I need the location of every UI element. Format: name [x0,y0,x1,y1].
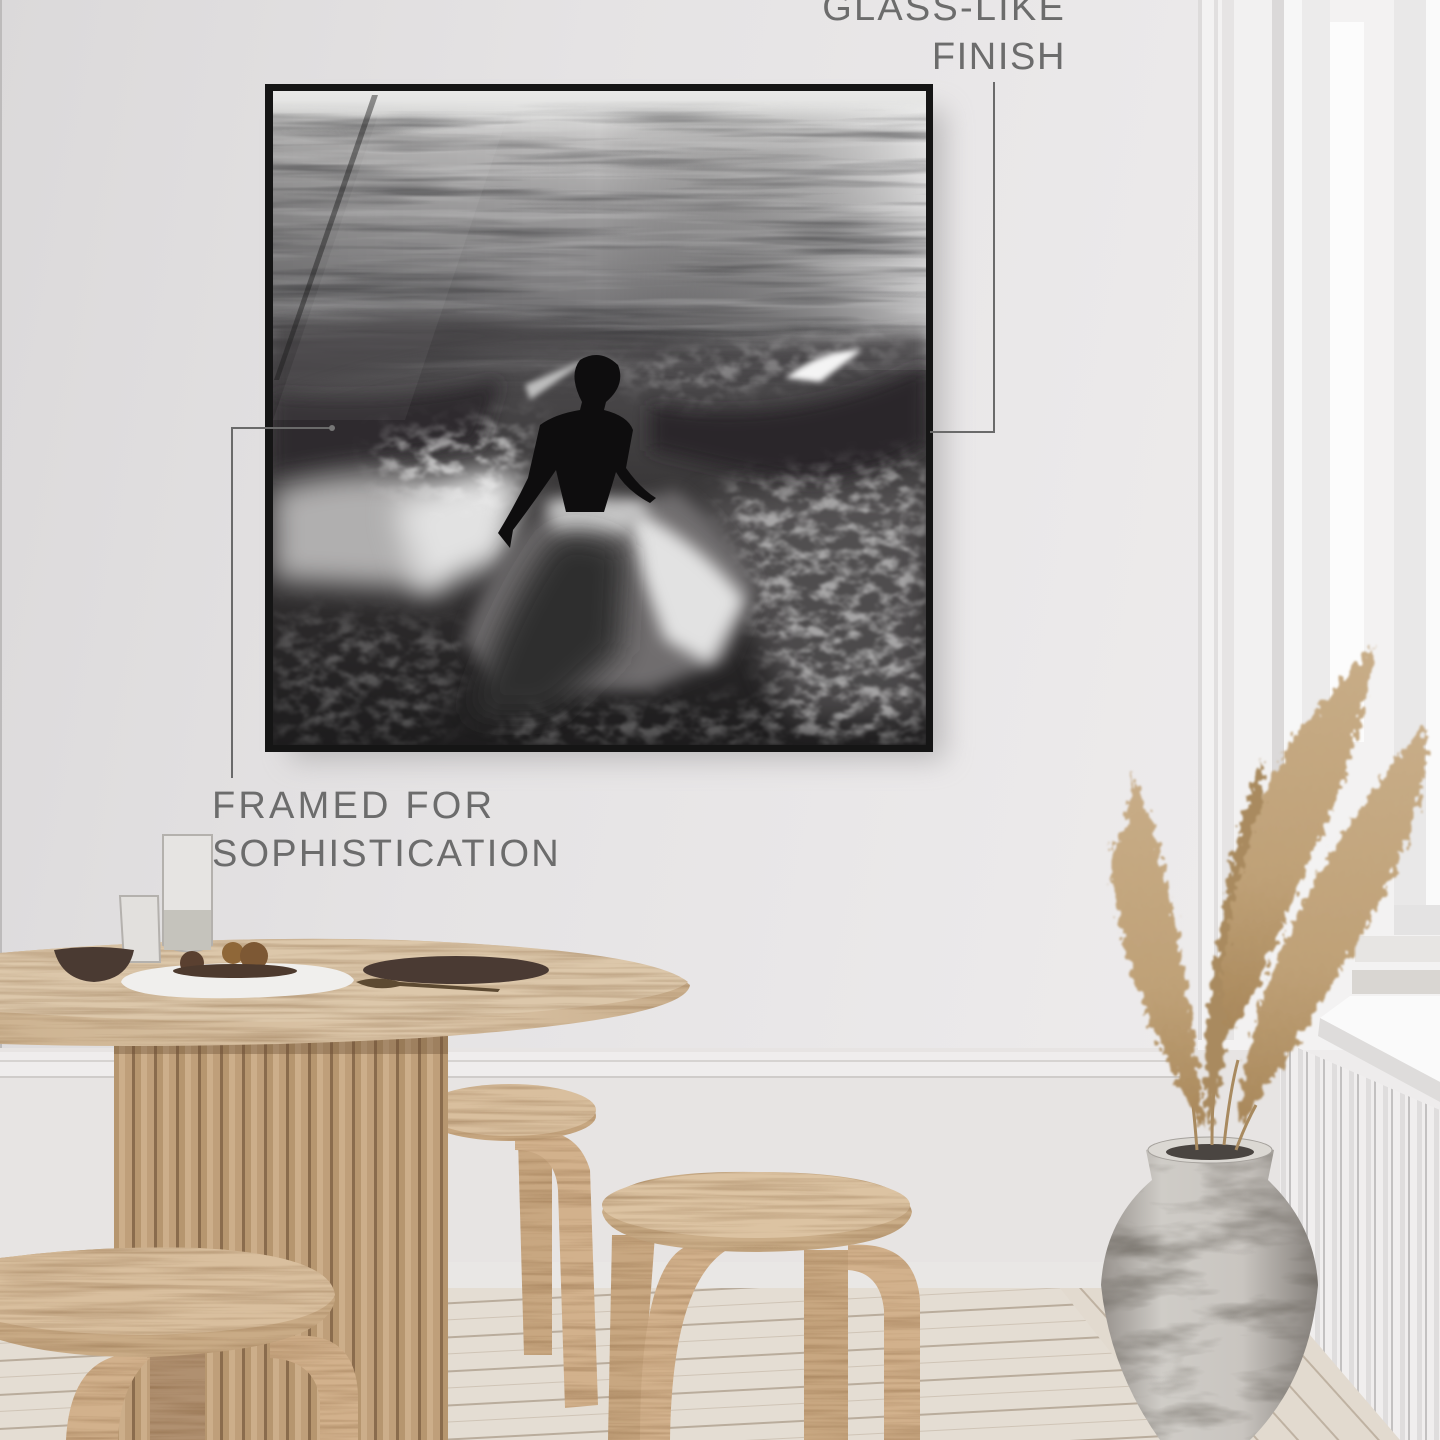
frame [265,84,933,752]
callout: framed for sophistication: SOPHISTICATION [212,833,561,875]
water skirt [465,490,755,690]
callout: framed for sophistication: FRAMED FOR [212,785,495,827]
window sill and books [1318,936,1440,1102]
glass reflection [274,288,438,420]
fluted table pedestal [114,1030,448,1440]
tabletop items [54,835,549,998]
artwork: ocean [273,91,926,745]
back stool [424,1084,598,1408]
glass [120,896,160,962]
floor [0,1288,1400,1440]
wood plate [363,956,549,984]
marble board with nuts [121,963,354,998]
vase [1101,1137,1318,1440]
callout: glass-like finish: FINISH [932,36,1066,78]
frame shadow [290,110,945,760]
figure silhouette [498,355,656,548]
callout: framed for sophistication [212,425,561,875]
carafe [163,835,212,952]
spoon [356,978,500,992]
front right stool [602,1172,920,1440]
pampas grass [1111,645,1426,1150]
radiator [1280,1040,1440,1440]
dark bowl [54,947,134,982]
window frame [1198,0,1440,1050]
wainscot and baseboard [0,1048,1290,1290]
front left stool [0,1247,358,1440]
table top [0,939,690,1046]
callout: glass-like finish [822,0,1066,432]
framed artwork [265,84,945,760]
